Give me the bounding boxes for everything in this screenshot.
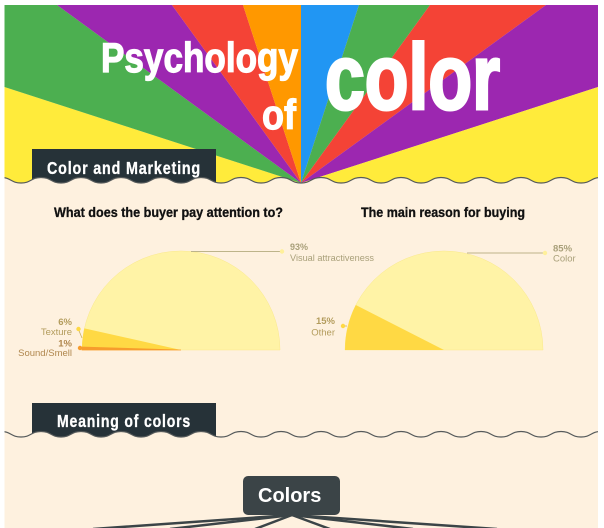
label: visual attractiveness: [290, 244, 374, 261]
leader: sound and smell: [78, 346, 82, 350]
header sunburst rays: [4, 5, 598, 190]
heading: buyer attention: What does the buyer pay attention to?: [54, 205, 283, 220]
wave divider 2: [32, 432, 216, 439]
leader: other: [341, 324, 347, 328]
label: texture: [41, 318, 72, 335]
label: sound and smell: 1%: [58, 338, 73, 350]
label: texture: 6%: [58, 317, 73, 328]
section banner: meaning of colors: [32, 403, 216, 439]
label: color: [553, 245, 576, 262]
section banner: meaning of colors: Meaning of colors: [57, 411, 191, 431]
chart: main reason semicircle: [311, 244, 576, 350]
leader: color: [467, 251, 547, 255]
section banner: color and marketing: [32, 149, 216, 185]
leader: visual attractiveness: [191, 249, 284, 254]
title: color: [325, 25, 500, 129]
section banner: color and marketing: Color and Marketing: [47, 158, 201, 178]
label: other: 15%: [316, 316, 336, 327]
colors root node: [243, 476, 340, 515]
leader: texture: [76, 327, 82, 338]
title: of: [262, 91, 297, 138]
title: Psychology: [101, 34, 299, 81]
heading: main reason: The main reason for buying: [361, 205, 525, 220]
label: sound and smell: Sound/Smell: [18, 348, 72, 359]
title: [102, 40, 500, 130]
label: sound and smell: [18, 340, 72, 356]
label: other: [312, 318, 335, 336]
tree connector lines: [93, 515, 497, 528]
colors root node: Colors: [258, 485, 321, 507]
label: visual attractiveness: 93%: [290, 242, 309, 253]
chart: buyer attention semicircle: [18, 242, 374, 359]
label: color: 85%: [553, 244, 573, 254]
label: color: Color: [553, 254, 576, 264]
label: texture: Texture: [41, 327, 72, 338]
label: other: Other: [311, 328, 335, 338]
wave divider 1: [4, 178, 598, 190]
label: visual attractiveness: Visual attractiveness: [290, 253, 374, 264]
